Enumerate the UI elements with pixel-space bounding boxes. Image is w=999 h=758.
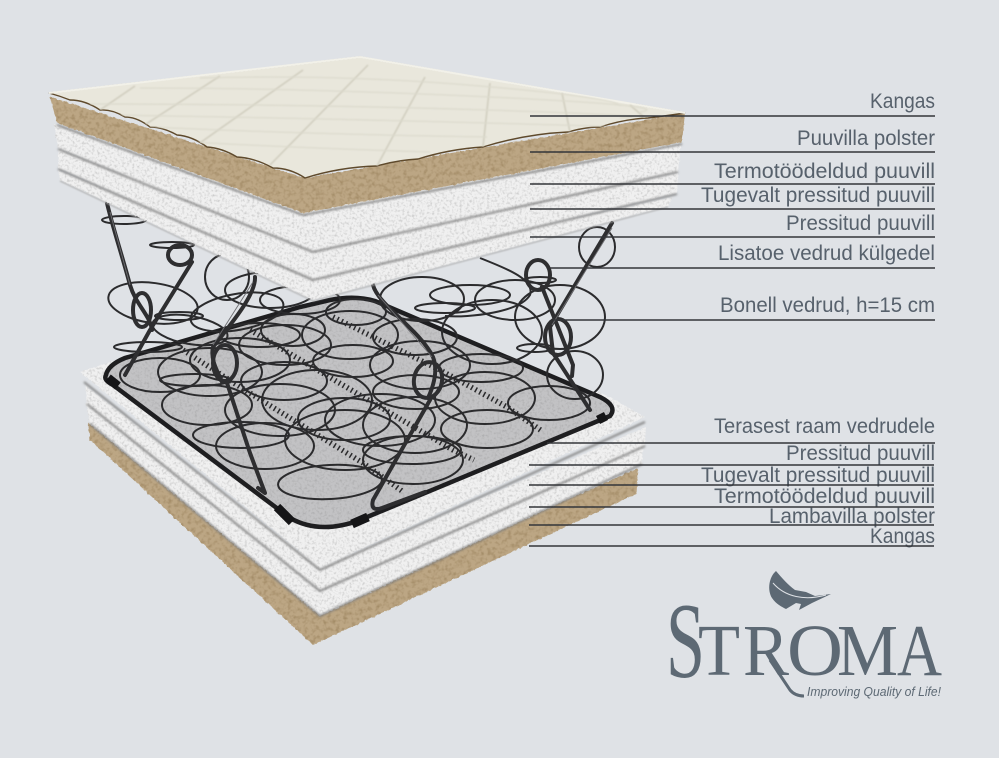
logo wordmark: R (743, 610, 789, 691)
top layer: cotton padding (50, 97, 685, 213)
label: lower Pressitud puuvill: Pressitud puuvill (786, 442, 935, 465)
top layer shadows (57, 125, 682, 280)
bottom layer: thermally treated cotton (86, 402, 643, 616)
label: Terasest raam vedrudele: Terasest raam vedrudele (714, 415, 935, 438)
frame outline (105, 298, 612, 527)
top mattress layers (49, 57, 685, 301)
frame base (105, 298, 612, 527)
top layer: strongly pressed cotton (58, 149, 678, 280)
label: Pressitud puuvill: Pressitud puuvill (786, 212, 935, 235)
bottom layer: pressed cotton (80, 362, 645, 568)
logo: Stroma (666, 571, 942, 701)
loop springs and thick side wires (107, 203, 612, 509)
label: Tugevalt pressitud puuvill: Tugevalt pressitud puuvill (701, 184, 935, 207)
logo wordmark: M (837, 610, 898, 691)
bottom layer: wool and fabric (88, 422, 638, 645)
label: Lambavilla polster: Lambavilla polster (769, 505, 935, 528)
label: lower Kangas: Kangas (870, 525, 935, 548)
logo wordmark: T (698, 610, 740, 691)
logo wordmark: O (787, 610, 843, 691)
icon: feather (769, 571, 831, 610)
quilting seams (90, 65, 647, 166)
fabric back rim (49, 57, 685, 113)
bonell coil springs (102, 216, 615, 502)
top layer: pressed cotton (58, 170, 673, 300)
label: Lisatoe vedrud külgedel: Lisatoe vedrud külgedel (718, 242, 935, 265)
label: Kangas: Kangas (870, 90, 935, 113)
top layer underside edge (60, 181, 668, 301)
logo wordmark (666, 582, 942, 701)
bottom mattress layers (80, 362, 646, 645)
logo tagline: Improving Quality of Life! (807, 684, 941, 699)
bottom layer shadows (84, 382, 645, 616)
label: Puuvilla polster: Puuvilla polster (797, 127, 935, 150)
frame clips (108, 378, 606, 524)
helical spring links (183, 317, 542, 491)
logo wordmark: A (897, 610, 942, 691)
logo wordmark: S (666, 582, 705, 701)
label: Termotöödeldud puuvill: Termotöödeldud puuvill (714, 160, 935, 183)
steel frame with foam base (105, 298, 612, 527)
top layer: thermally treated cotton (54, 124, 681, 252)
label: lower Termotöödeldud puuvill: Termotöödeldud puuvill (714, 485, 935, 508)
top layer: quilted fabric (49, 57, 685, 178)
bottom layer: strongly pressed cotton (85, 385, 646, 590)
label: Bonell vedrud: Bonell vedrud, h=15 cm (720, 294, 935, 317)
label: lower Tugevalt pressitud puuvill: Tugevalt pressitud puuvill (701, 464, 935, 487)
